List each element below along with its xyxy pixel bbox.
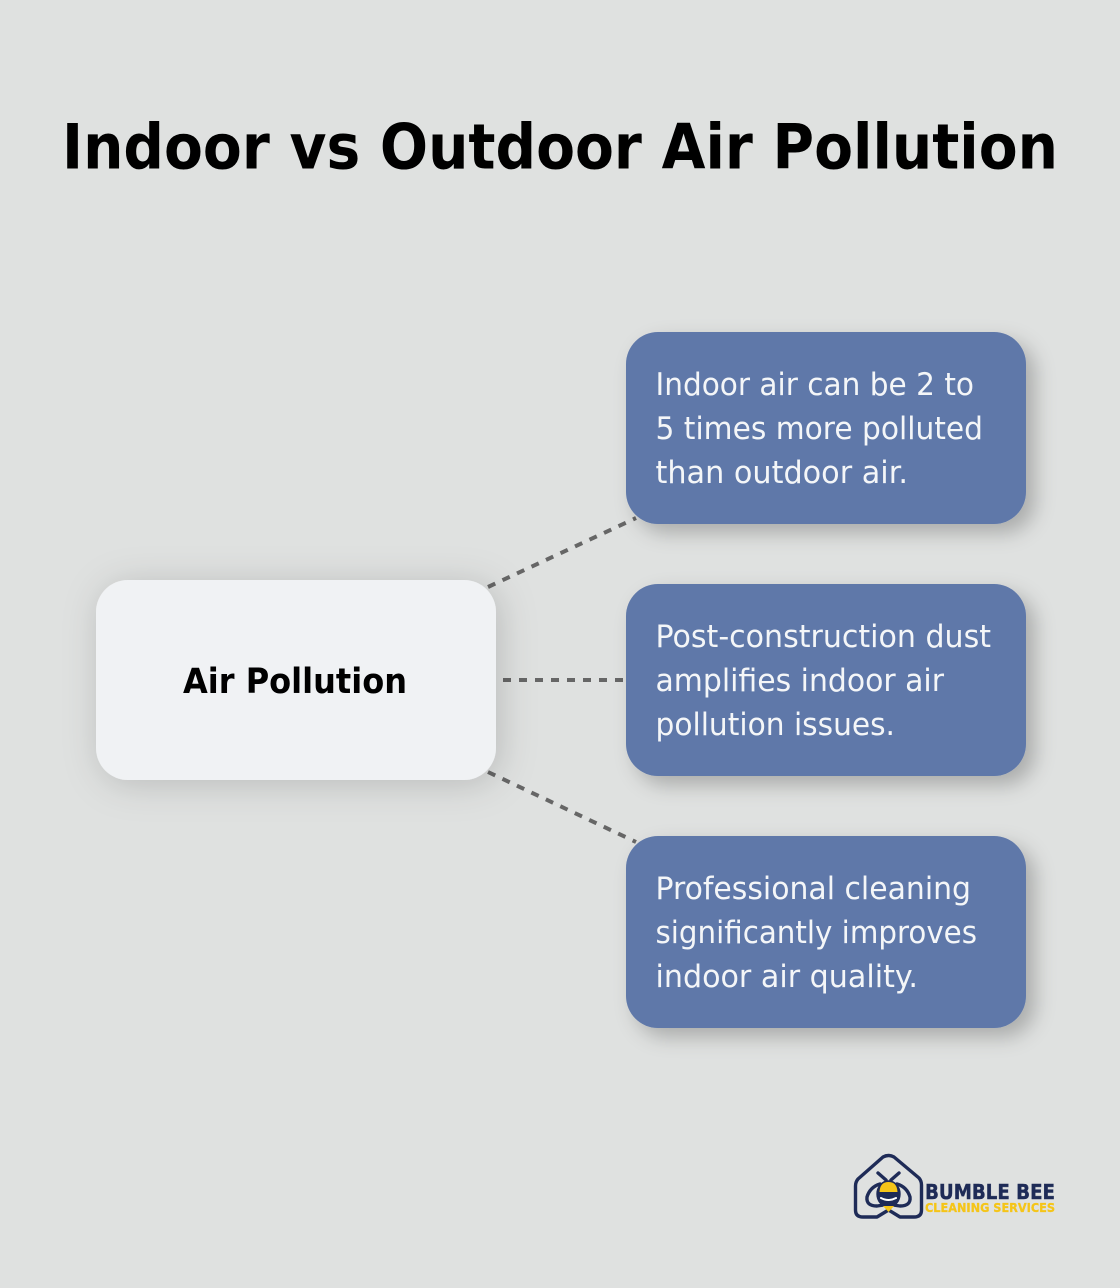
fact text <box>656 871 977 995</box>
panel: air pollution <box>96 580 496 780</box>
fact text <box>656 367 983 491</box>
logo: Bumble Bee Cleaning Services <box>856 1156 1055 1217</box>
fact text: Indoor air can be 2 to <box>656 367 974 403</box>
fact text: Post-construction dust <box>656 619 991 655</box>
connector: middle <box>503 678 624 682</box>
fact text: 5 times more polluted <box>656 411 983 447</box>
fact text: significantly improves <box>656 915 977 951</box>
fact text: amplifies indoor air <box>656 663 944 699</box>
fact text: than outdoor air. <box>656 455 908 491</box>
connector: bottom <box>488 772 636 842</box>
title: Indoor vs Outdoor Air Pollution <box>62 110 1058 184</box>
panel: post-construction fact <box>626 584 1026 776</box>
fact text: pollution issues. <box>656 707 895 743</box>
fact text: indoor air quality. <box>656 959 918 995</box>
logo tagline: CLEANING SERVICES <box>925 1201 1055 1215</box>
panel: professional cleaning fact <box>626 836 1026 1028</box>
label: air pollution: Air Pollution <box>183 662 407 702</box>
logo wordmark: BUMBLE BEE <box>925 1180 1055 1204</box>
icon: house with bee <box>856 1156 922 1217</box>
panel: indoor air fact <box>626 332 1026 524</box>
fact text: Professional cleaning <box>656 871 971 907</box>
connector: top <box>488 518 636 587</box>
fact text <box>656 619 991 743</box>
